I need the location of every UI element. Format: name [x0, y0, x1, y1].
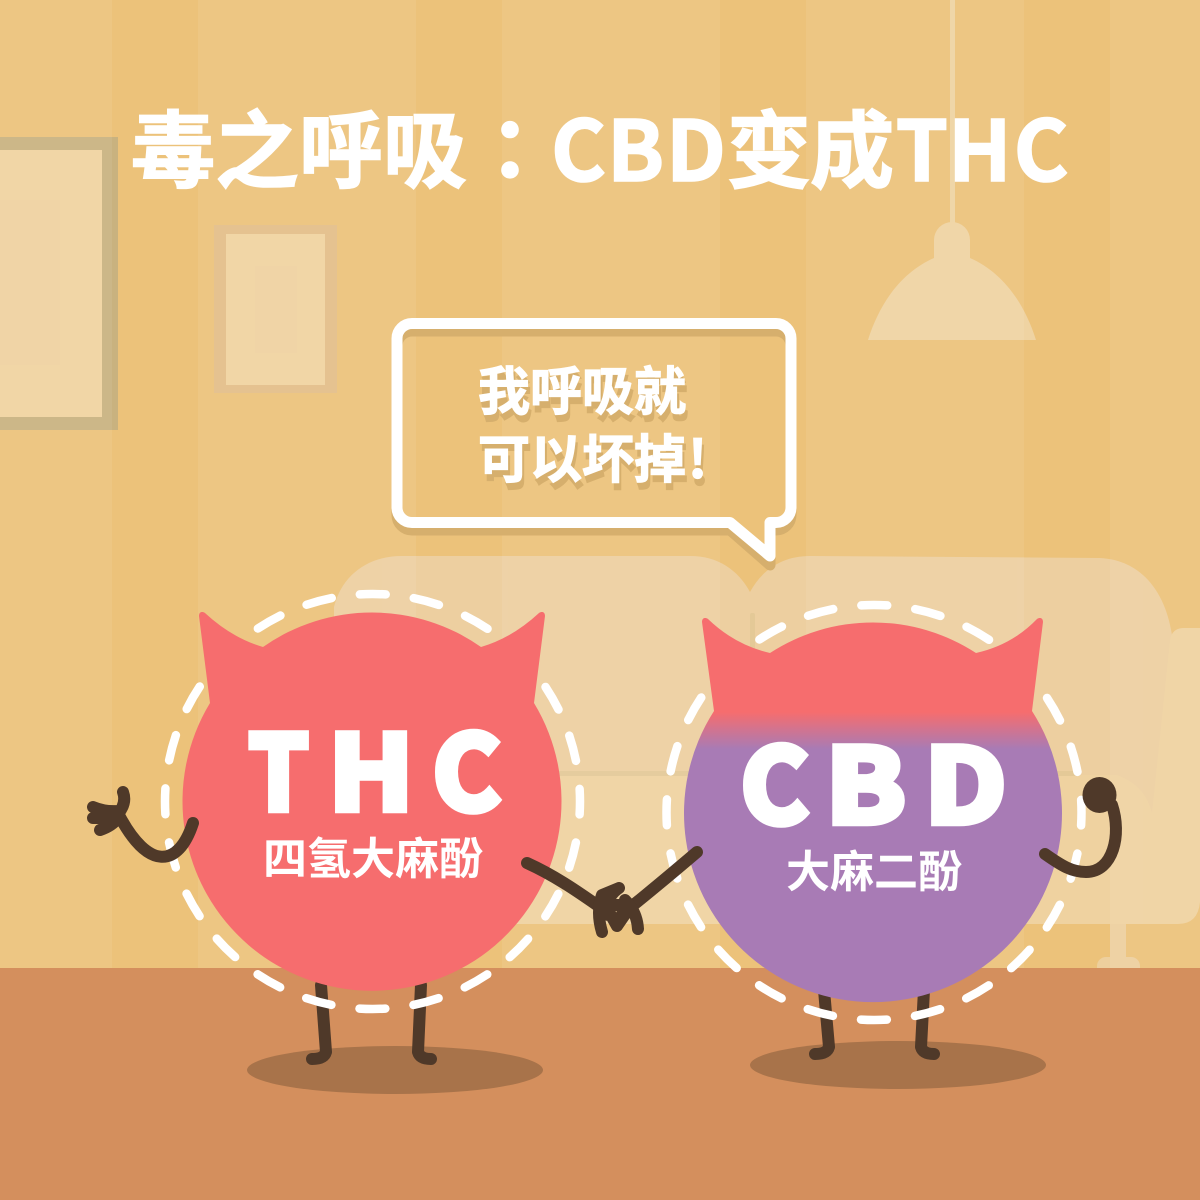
CBD body: [684, 618, 1062, 1002]
title: 变成: [727, 85, 894, 206]
large picture frame: [0, 137, 118, 430]
CBD legs: [815, 990, 934, 1054]
CBD right arm: [1045, 777, 1116, 872]
THC label: H: [329, 691, 413, 839]
CBD label: D: [925, 705, 1006, 853]
floor: [0, 968, 1200, 1200]
CBD shadow: [750, 1041, 1046, 1089]
THC label: 四氢大麻酚: [263, 823, 483, 887]
bubble text: 我呼吸就: [478, 350, 686, 425]
small picture frame: [214, 225, 337, 393]
THC label: T: [249, 692, 308, 839]
title: CBD: [551, 85, 726, 206]
CBD left arm: [622, 852, 697, 914]
CBD label: 大麻二酚: [786, 836, 962, 900]
THC shadow: [247, 1046, 543, 1094]
bubble text shadow: [480, 357, 709, 500]
pendant lamp: [868, 0, 1036, 340]
bubble text: [478, 350, 707, 493]
THC label: C: [433, 692, 500, 839]
CBD label: [741, 705, 1006, 900]
THC label: [249, 691, 500, 887]
speech bubble: [397, 324, 791, 565]
title: THC: [896, 85, 1069, 206]
CBD label: C: [741, 705, 808, 852]
bubble text: 可以坏掉!: [478, 418, 707, 493]
sofa: [330, 556, 1200, 968]
THC body: [183, 612, 562, 991]
THC right arm: [527, 863, 610, 914]
bubble text shadow: 可以坏掉!: [480, 425, 709, 500]
THC left arm: [93, 792, 193, 857]
clasped hands: [599, 888, 638, 932]
CBD dashed ring: [666, 605, 1082, 1020]
THC legs: [312, 985, 431, 1059]
title: 毒之呼吸: [131, 85, 467, 206]
title: ：: [468, 85, 552, 206]
CBD label: B: [826, 705, 905, 852]
THC dashed ring: [165, 594, 580, 1009]
bubble text shadow: 我呼吸就: [480, 357, 688, 432]
